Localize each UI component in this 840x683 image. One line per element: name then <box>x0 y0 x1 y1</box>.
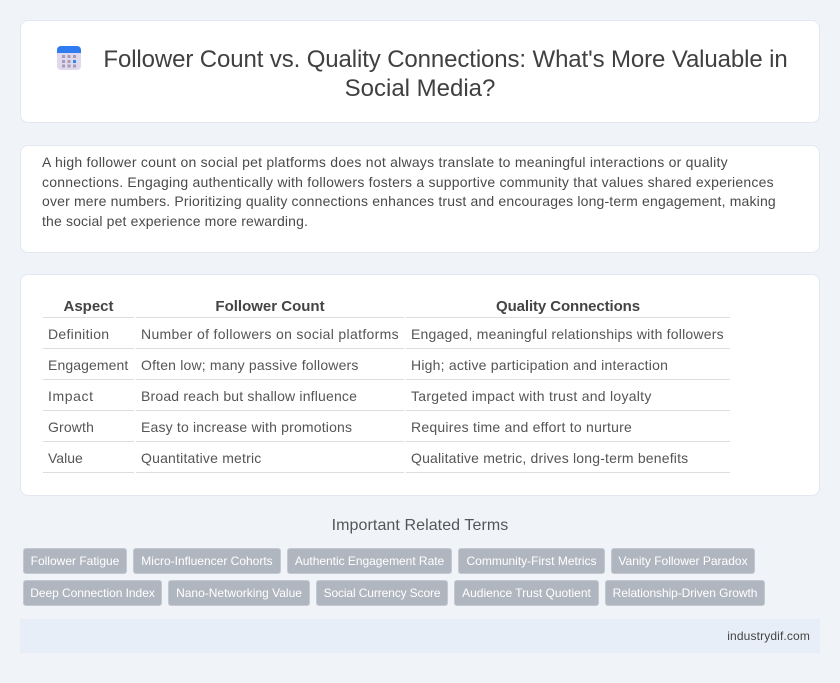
row: value: Quantitative metric <box>141 450 262 466</box>
tag <box>23 548 127 574</box>
related terms tags <box>23 548 765 606</box>
row: growth <box>48 419 632 435</box>
tag: Social Currency Score <box>324 586 440 600</box>
tag <box>316 580 448 606</box>
tag <box>454 580 599 606</box>
tag: Micro-Influencer Cohorts <box>141 554 273 568</box>
tag: Follower Fatigue <box>31 554 119 568</box>
tag <box>458 548 605 574</box>
tag: Relationship-Driven Growth <box>613 586 757 600</box>
table header row: Follower Count <box>215 298 325 315</box>
panel: comparison table <box>20 274 820 496</box>
title: Social Media? <box>345 75 495 102</box>
footer source text: industrydif.com <box>727 629 810 643</box>
table header row: Quality Connections <box>496 298 640 315</box>
row: impact: Broad reach but shallow influence <box>141 388 357 404</box>
icon: calendar <box>57 46 81 70</box>
intro text: A high follower count on social pet platforms does not always translate to meaningful interactions or quality <box>42 154 728 170</box>
title: Follower Count vs. Quality Connections: What's More Valuable in <box>103 46 788 73</box>
row: growth: Growth <box>48 419 94 435</box>
intro text: the social pet experience more rewarding. <box>42 213 308 229</box>
tag <box>287 548 452 574</box>
panel: intro paragraph <box>20 145 820 253</box>
tag <box>605 580 765 606</box>
table header row <box>63 298 640 315</box>
comparison table <box>43 298 730 473</box>
row: engagement: High; active participation and interaction <box>411 357 668 373</box>
row: definition: Engaged, meaningful relationships with followers <box>411 326 724 342</box>
tag <box>23 580 162 606</box>
row: growth: Easy to increase with promotions <box>141 419 352 435</box>
row: impact: Targeted impact with trust and loyalty <box>411 388 652 404</box>
related terms heading: Important Related Terms <box>332 517 508 534</box>
row: engagement: Often low; many passive followers <box>141 357 359 373</box>
row: engagement <box>48 357 668 373</box>
table header row: Aspect <box>63 298 114 315</box>
footer bar <box>20 619 820 653</box>
tag: Vanity Follower Paradox <box>618 554 748 568</box>
row: value <box>48 450 688 466</box>
title <box>103 46 788 102</box>
tag <box>611 548 755 574</box>
tag <box>133 548 281 574</box>
intro text <box>42 154 776 229</box>
tag: Audience Trust Quotient <box>462 586 591 600</box>
intro text: over mere numbers. Prioritizing quality connections enhances trust and encourages long-term engagement, making <box>42 193 776 209</box>
intro text: connections. Engaging authentically with followers fosters a supportive community that values shared experiences <box>42 174 774 190</box>
tag: Community-First Metrics <box>466 554 596 568</box>
row: growth: Requires time and effort to nurture <box>411 419 632 435</box>
header panel <box>20 20 820 123</box>
tag: Authentic Engagement Rate <box>295 554 444 568</box>
row: engagement: Engagement <box>48 357 128 373</box>
tag <box>168 580 310 606</box>
row: definition: Definition <box>48 326 109 342</box>
tag: Deep Connection Index <box>30 586 155 600</box>
row: impact <box>48 388 652 404</box>
row: definition <box>48 326 724 342</box>
row: definition: Number of followers on social platforms <box>141 326 399 342</box>
tag: Nano-Networking Value <box>176 586 302 600</box>
row: impact: Impact <box>48 388 94 404</box>
row: value: Qualitative metric, drives long-term benefits <box>411 450 688 466</box>
row: value: Value <box>48 450 83 466</box>
